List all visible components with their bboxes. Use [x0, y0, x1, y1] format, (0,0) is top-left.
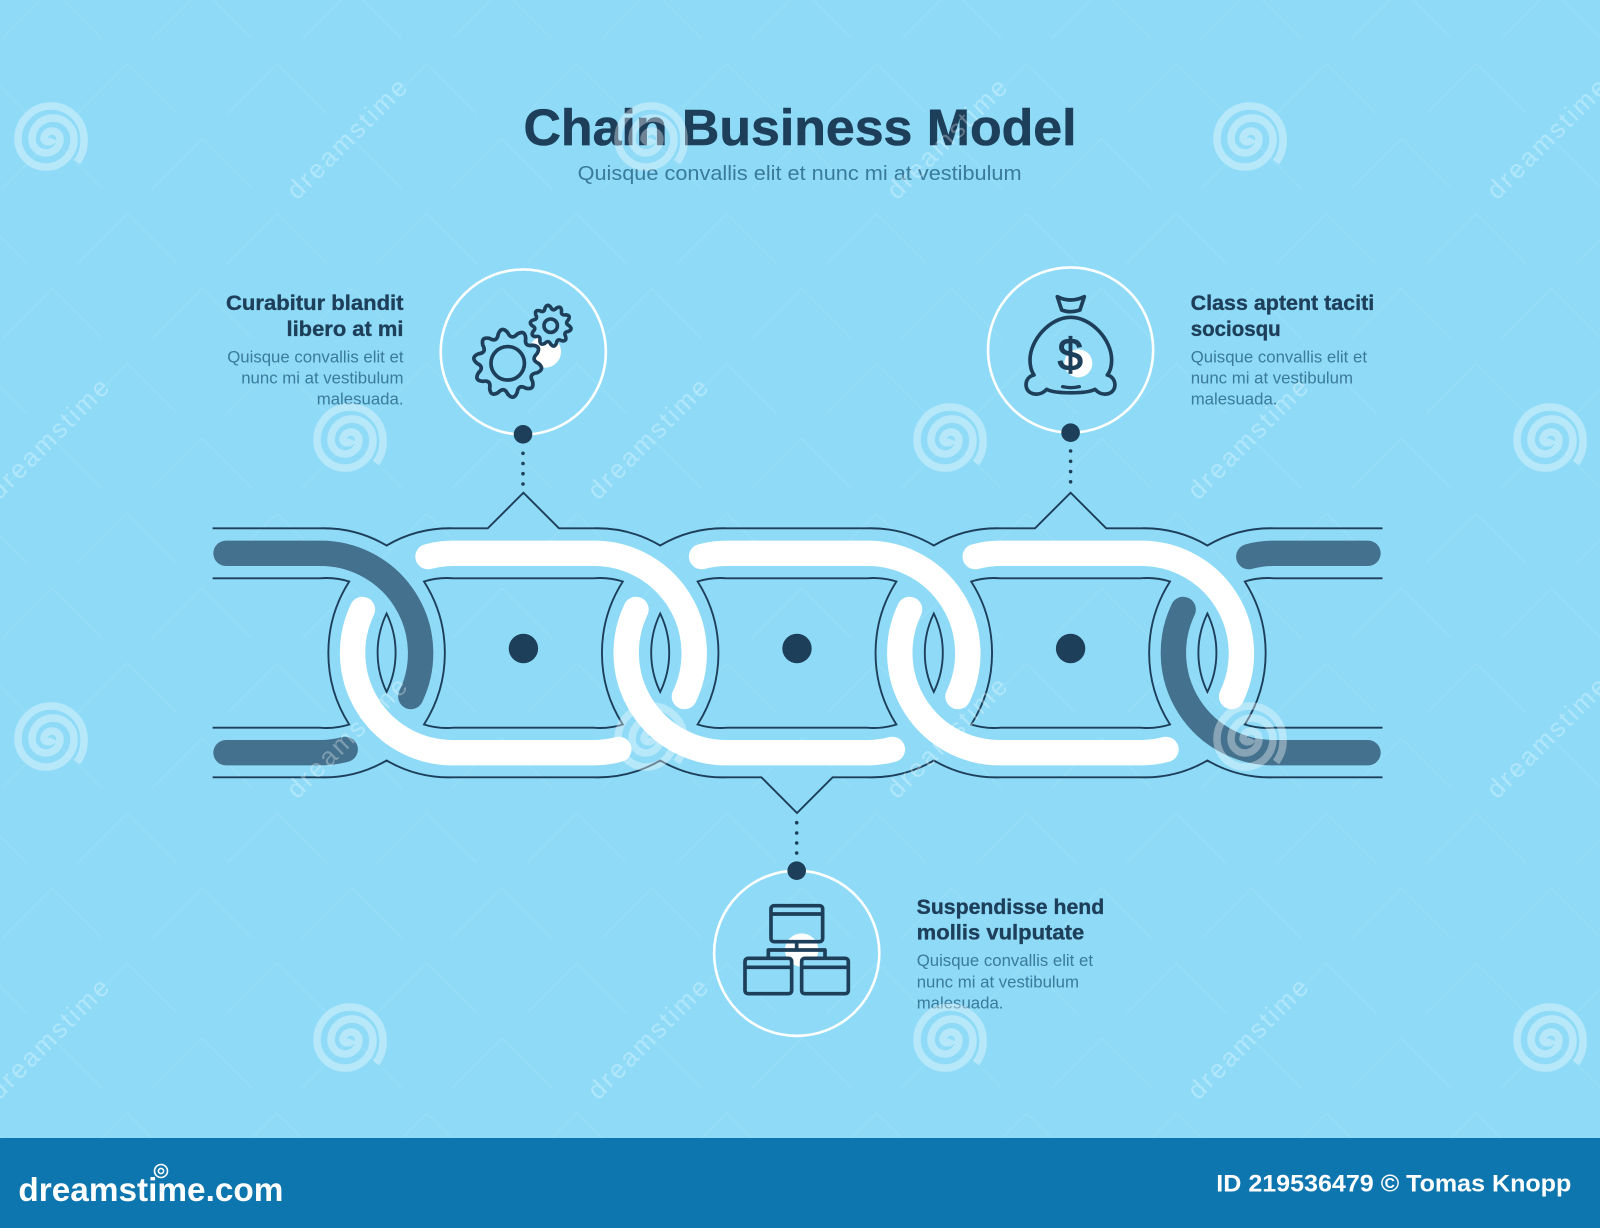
watermark text: dreamstime [280, 72, 413, 205]
text block: Suspendisse hend [917, 896, 1104, 1012]
text block: Class aptent taciti: nunc mi at vestibulum [1191, 368, 1353, 388]
text block: Class aptent taciti: Class aptent taciti [1191, 292, 1374, 315]
watermark spirals [18, 106, 1583, 1068]
callout: gears [226, 269, 606, 486]
footer bar [0, 1138, 1600, 1228]
subtitle: Quisque convallis elit et nunc mi at vestibulum [578, 162, 1022, 185]
text block: Curabitur blandit: malesuada. [317, 390, 404, 408]
white chain links [353, 553, 1241, 753]
text block: Curabitur blandit: nunc mi at vestibulum [241, 368, 404, 388]
title: Chain Business Model [524, 99, 1076, 156]
text block: Suspendisse hend: mollis vulputate [917, 921, 1084, 944]
text block: Curabitur blandit [226, 292, 404, 408]
watermark text: dreamstime [880, 72, 1013, 205]
text block: Class aptent taciti [1191, 292, 1374, 408]
connector dot and dotted line [1061, 423, 1080, 484]
icon: hierarchy windows [745, 906, 848, 994]
watermark text: dreamstime [1181, 372, 1314, 505]
watermark text: dreamstime [280, 671, 413, 804]
callout: money bag [988, 267, 1374, 484]
connector dot and dotted line [514, 425, 532, 486]
icon: money bag: $ [1058, 329, 1083, 380]
text block: Class aptent taciti: sociosqu [1191, 318, 1281, 341]
link center dots [509, 634, 1085, 663]
chain diagram [213, 493, 1383, 813]
text block: Curabitur blandit: Curabitur blandit [226, 292, 404, 315]
icon circle [988, 267, 1153, 433]
text block: Curabitur blandit: libero at mi [286, 318, 404, 341]
icon: gears [474, 305, 571, 397]
watermark text: dreamstime [581, 372, 714, 505]
footer logo: dreamstime.com [18, 1171, 283, 1208]
text block: Suspendisse hend: Quisque convallis elit et [917, 951, 1093, 970]
text block: Class aptent taciti: Quisque convallis elit et [1191, 347, 1367, 366]
icon: money bag [1026, 297, 1115, 394]
footer logo mark [154, 1164, 168, 1178]
footer credit: ID 219536479 © Tomas Knopp [1216, 1171, 1571, 1198]
text block: Suspendisse hend: malesuada. [917, 994, 1003, 1012]
callout: hierarchy [714, 821, 1104, 1036]
text block: Suspendisse hend: Suspendisse hend [917, 896, 1104, 919]
watermark text: dreamstime [1181, 972, 1314, 1105]
text block: Class aptent taciti: malesuada. [1191, 390, 1277, 408]
text block: Suspendisse hend: nunc mi at vestibulum [917, 973, 1079, 992]
link overlap lenses [378, 614, 1216, 692]
chain outer outline bottom [213, 760, 1383, 813]
watermark text: dreamstime [880, 671, 1013, 804]
icon circle [441, 269, 606, 435]
text block: Curabitur blandit: Quisque convallis elit et [227, 347, 404, 366]
dark end links [226, 553, 1368, 753]
watermark text: dreamstime [581, 972, 714, 1105]
connector dot and dotted line [787, 821, 806, 880]
icon circle [714, 871, 879, 1036]
link window outlines [213, 578, 1383, 728]
chain outer outline top [213, 493, 1383, 546]
